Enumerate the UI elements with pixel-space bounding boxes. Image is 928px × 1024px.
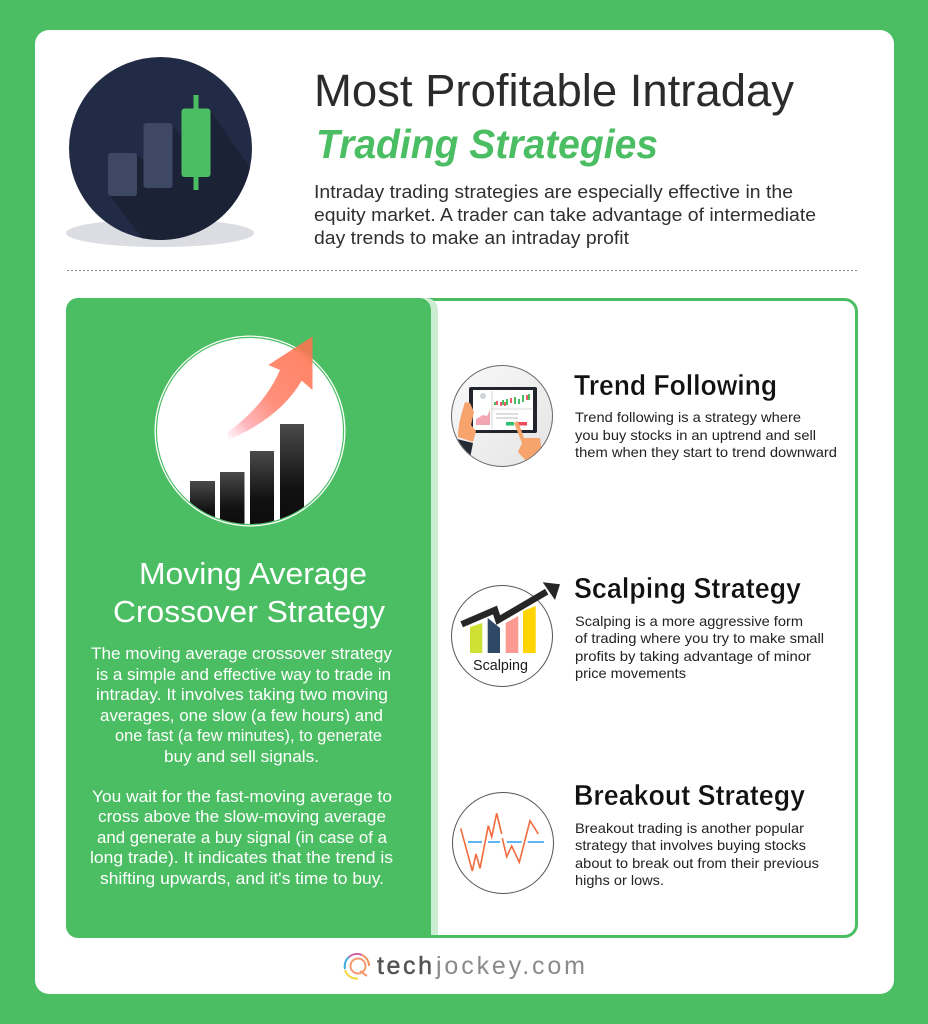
- left body text: intraday. It involves taking two moving: [96, 686, 388, 704]
- intro text: Intraday trading strategies are especially effective in the: [314, 181, 793, 202]
- heading: trend following: Trend Following: [574, 370, 777, 402]
- left body text: long trade). It indicates that the trend is: [90, 849, 393, 867]
- text: trend following: you buy stocks in an uptrend and sell: [575, 427, 816, 443]
- text: breakout: Breakout trading is another popular: [575, 820, 804, 836]
- left body text: buy and sell signals.: [164, 748, 319, 766]
- icon: tablet trading: [452, 366, 552, 466]
- text: breakout: strategy that involves buying stocks: [575, 837, 806, 853]
- text: trend following: them when they start to trend downward: [575, 444, 837, 460]
- icon: scalping: Scalping: [473, 658, 528, 674]
- text: breakout: about to break out from their previous: [575, 855, 819, 871]
- text: scalping: Scalping is a more aggressive form: [575, 613, 803, 629]
- logo: techjockey: tech: [377, 952, 432, 980]
- text: scalping: [575, 613, 824, 681]
- left body text: and generate a buy signal (in case of a: [97, 829, 388, 847]
- text: scalping: profits by taking advantage of minor: [575, 648, 811, 664]
- left body text: The moving average crossover strategy: [91, 645, 393, 663]
- logo: techjockey: [345, 952, 585, 980]
- left body text: cross above the slow-moving average: [98, 808, 386, 826]
- intro text: [314, 181, 816, 248]
- text: scalping: price movements: [575, 665, 686, 681]
- left body text: shifting upwards, and it's time to buy.: [100, 870, 384, 888]
- left heading: [113, 556, 386, 629]
- left body text: is a simple and effective way to trade in: [96, 666, 391, 684]
- left body text: You wait for the fast-moving average to: [92, 788, 392, 806]
- logo: techjockey: jockey.com: [435, 952, 585, 980]
- main panel: [66, 298, 856, 938]
- intro text: day trends to make an intraday profit: [314, 227, 629, 248]
- left body text: [90, 645, 393, 888]
- icon: rising bar chart with arrow: [154, 336, 346, 532]
- title: [314, 65, 794, 167]
- heading: breakout strategy: Breakout Strategy: [574, 780, 805, 812]
- icon: candlestick logo: [66, 57, 260, 250]
- left heading: Crossover Strategy: [113, 594, 386, 629]
- left body text: one fast (a few minutes), to generate: [115, 727, 382, 745]
- title: Trading Strategies: [316, 121, 658, 167]
- left heading: Moving Average: [139, 556, 367, 591]
- text: scalping: of trading where you try to make small: [575, 630, 824, 646]
- left body text: averages, one slow (a few hours) and: [100, 707, 383, 725]
- title: Most Profitable Intraday: [314, 65, 794, 116]
- text: breakout: highs or lows.: [575, 872, 664, 888]
- intro text: equity market. A trader can take advantage of intermediate: [314, 204, 816, 225]
- text: breakout: [575, 820, 819, 888]
- icon: scalping: [452, 582, 560, 686]
- text: trend following: Trend following is a strategy where: [575, 409, 801, 425]
- heading: scalping strategy: Scalping Strategy: [574, 573, 801, 605]
- text: trend following: [575, 409, 837, 460]
- icon: breakout line chart: [452, 792, 554, 894]
